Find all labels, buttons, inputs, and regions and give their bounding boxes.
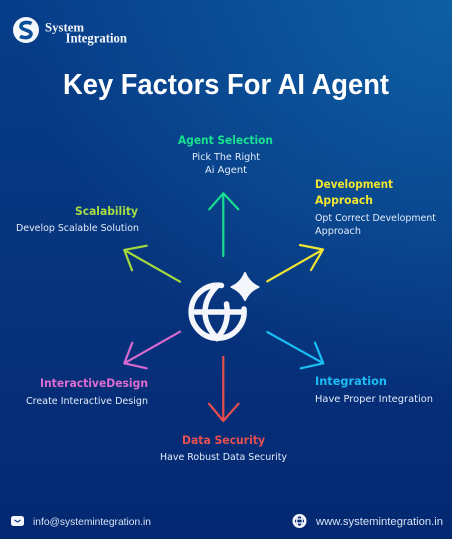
icon: logo circle <box>13 17 39 43</box>
icon: globe with sparkle <box>191 273 258 338</box>
footer: website: www.systemintegration.in <box>315 516 443 528</box>
label: data security <box>160 433 287 463</box>
label: development approach: Approach <box>315 226 361 237</box>
label: scalability: Scalability <box>75 204 138 218</box>
label: development approach: Approach <box>315 193 373 207</box>
label: development approach: Development <box>315 177 393 191</box>
title: Key Factors For AI Agent <box>63 69 389 101</box>
arrow: data security <box>209 357 238 421</box>
label: scalability: Develop Scalable Solution <box>16 223 139 234</box>
arrow: development approach <box>267 245 323 281</box>
arrow: integration <box>267 332 323 368</box>
label: integration <box>315 374 433 405</box>
label: agent selection: Ai Agent <box>205 165 247 176</box>
label: integration: Integration <box>315 374 387 388</box>
arrow: agent selection <box>209 193 238 256</box>
label: data security: Have Robust Data Security <box>160 452 287 463</box>
arrow: scalability <box>124 246 180 282</box>
logo: System Integration <box>13 17 127 46</box>
label: integration: Have Proper Integration <box>315 394 433 405</box>
arrow: interactive design <box>124 332 180 368</box>
label: agent selection <box>178 133 273 176</box>
logo: System Integration: Integration <box>66 30 127 46</box>
icon: globe <box>293 515 306 527</box>
footer: email: info@systemintegration.in <box>33 516 151 528</box>
label: scalability <box>16 204 139 234</box>
icon: envelope <box>11 516 24 526</box>
logo: System Integration: System <box>45 20 84 34</box>
label: interactive design: Create Interactive Design <box>26 396 148 407</box>
label: agent selection: Pick The Right <box>192 152 260 163</box>
label: development approach <box>315 177 436 237</box>
label: interactive design <box>26 376 148 407</box>
label: agent selection: Agent Selection <box>178 133 273 147</box>
label: data security: Data Security <box>182 433 265 447</box>
label: interactive design: InteractiveDesign <box>40 376 148 390</box>
label: development approach: Opt Correct Development <box>315 213 436 224</box>
